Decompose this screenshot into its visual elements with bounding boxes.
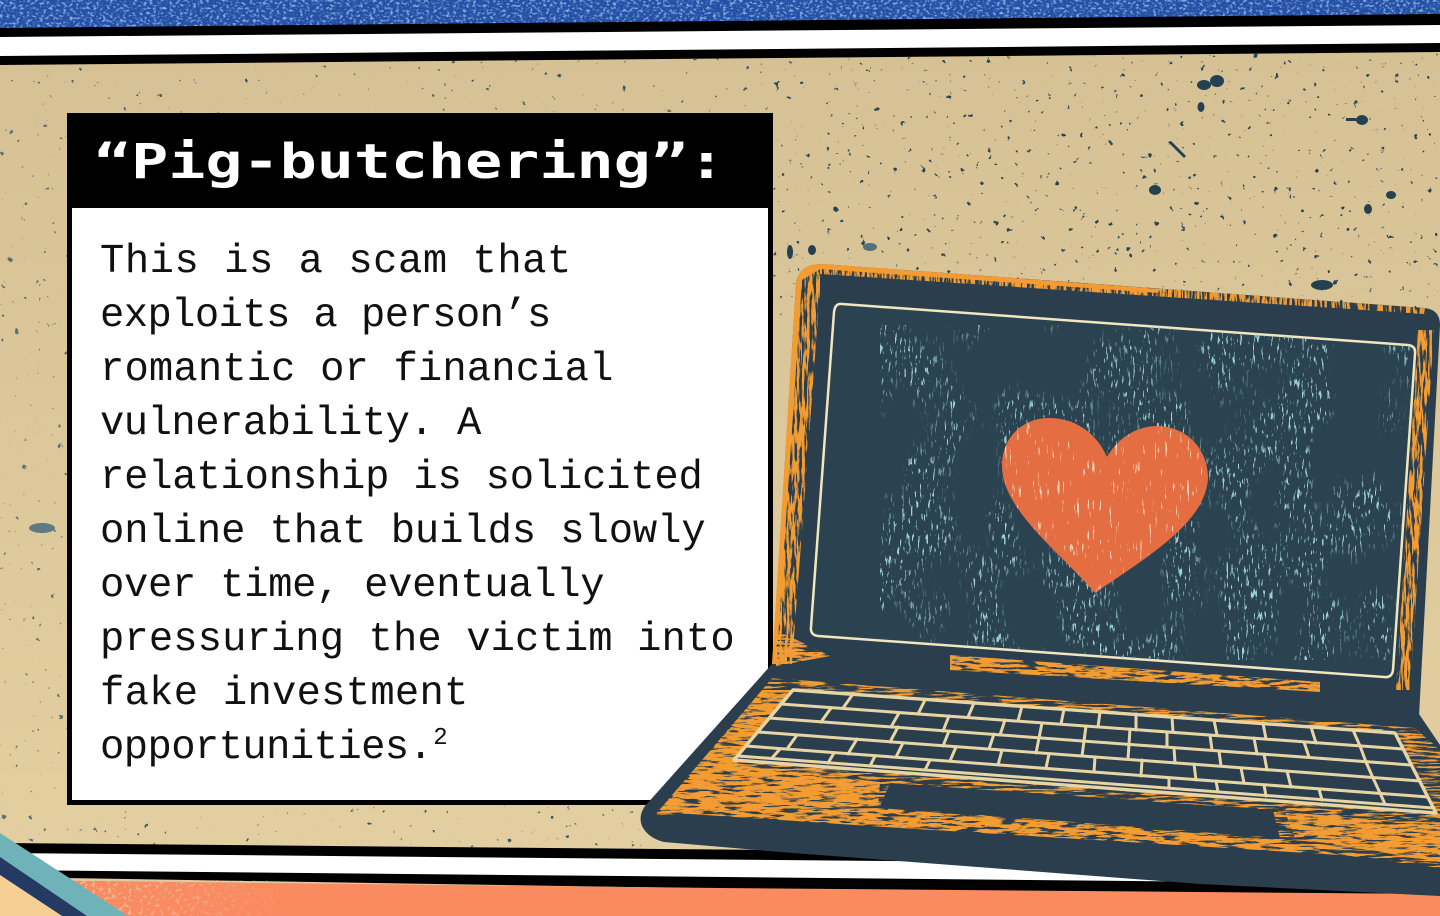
screen [811, 304, 1415, 677]
definition text: romantic or financial [100, 347, 614, 393]
definition text: relationship is solicited [100, 455, 703, 501]
laptop lid [772, 264, 1440, 716]
definition text [100, 239, 735, 771]
top stripes [0, 14, 1440, 66]
definition text: fake investment [100, 671, 469, 717]
definition text: opportunities.2 [100, 725, 448, 771]
definition text: exploits a person’s [100, 293, 551, 339]
bottom stripes [0, 843, 1440, 900]
corner diagonal stripes [0, 833, 128, 916]
blue band [0, 0, 1440, 30]
laptop base [641, 664, 1440, 896]
card title bar: “Pig-butchering”: [94, 134, 725, 190]
heart [1000, 415, 1210, 595]
trackpad [880, 783, 1280, 838]
salmon band [0, 880, 1440, 916]
laptop illustration [640, 264, 1440, 896]
worn orange on base [660, 678, 1440, 868]
card body panel [72, 208, 768, 800]
definition text: pressuring the victim into [100, 617, 735, 663]
definition card [67, 113, 773, 805]
definition text: vulnerability. A [100, 401, 481, 447]
definition text: over time, eventually [100, 563, 604, 609]
keyboard [734, 690, 1436, 813]
definition text: This is a scam that [100, 239, 572, 285]
large specks [29, 75, 1396, 533]
screen chalk texture [880, 325, 1410, 660]
definition text: online that builds slowly [100, 509, 706, 555]
orange lid wear [772, 264, 1425, 664]
